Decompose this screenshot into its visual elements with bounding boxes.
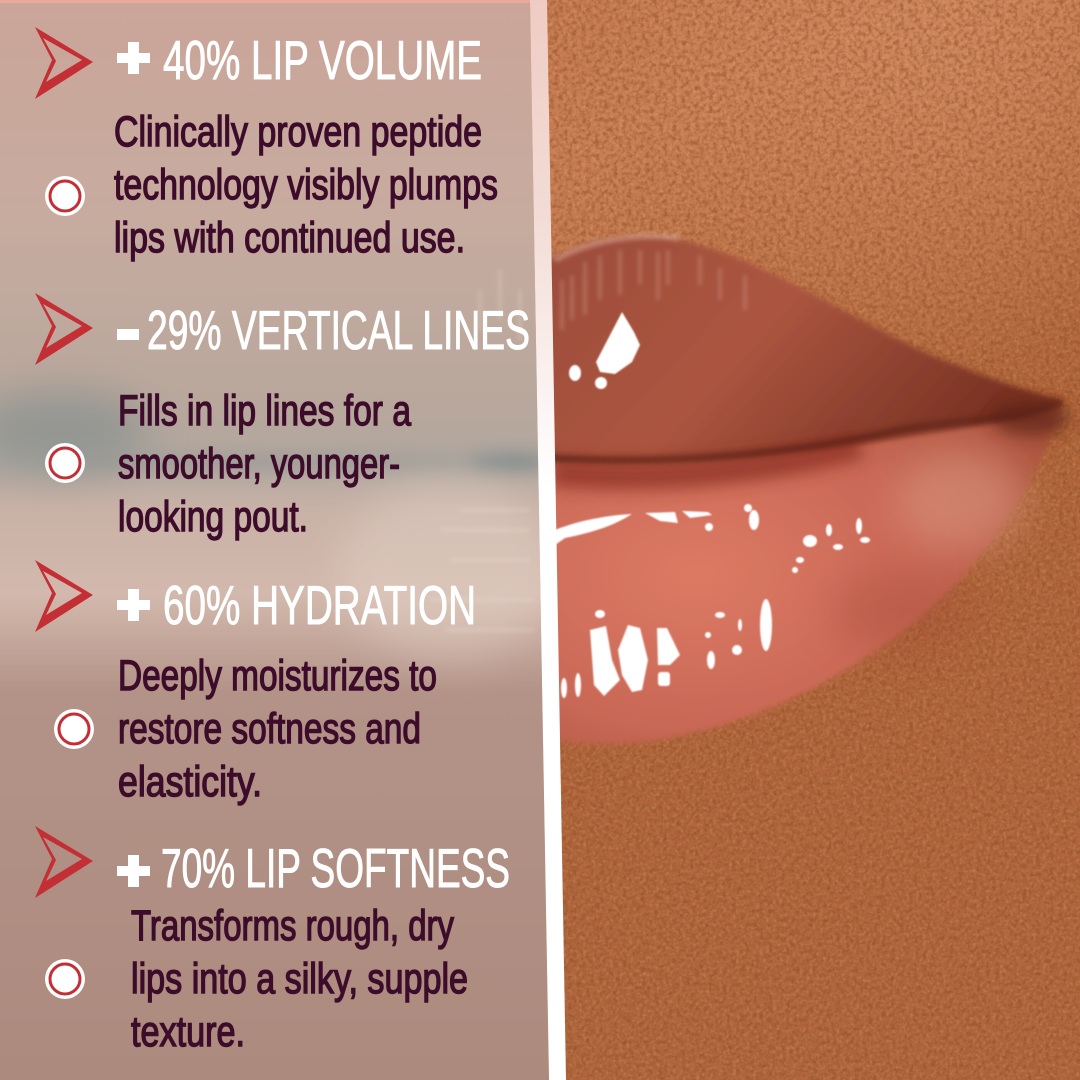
- faded gloss texture: [478, 274, 521, 336]
- text: description: Fills in lip lines for a: [118, 387, 411, 435]
- photo: glossy lips: [540, 236, 1070, 744]
- icon: bullet circle: [45, 176, 85, 216]
- lip gloss texture: [555, 236, 745, 330]
- text: description: smoother, younger-: [118, 440, 400, 488]
- item 2: vertical lines: [35, 293, 530, 541]
- text: description: elasticity.: [118, 758, 262, 806]
- text: description: [118, 652, 437, 806]
- icon: bullet circle: [45, 959, 85, 999]
- item 1: lip volume: [35, 27, 498, 262]
- icon: bullet circle: [54, 709, 94, 749]
- divider strip: [530, 0, 566, 1080]
- lip highlights: [555, 312, 870, 698]
- icon: arrow: [35, 27, 93, 99]
- heading: 70% lip softness: 70% LIP SOFTNESS: [161, 837, 510, 899]
- icon: minus sign: [117, 329, 139, 340]
- text: description: Transforms rough, dry: [131, 902, 454, 950]
- text: description: [131, 902, 468, 1056]
- heading: 29% vertical lines: 29% VERTICAL LINES: [147, 299, 530, 361]
- text: description: technology visibly plumps: [114, 161, 498, 209]
- icon: plus sign: [117, 42, 150, 74]
- icon: bullet circle: [45, 443, 85, 483]
- panel: translucent overlay with faded lips: [0, 0, 560, 1080]
- text: description: Deeply moisturizes to: [118, 652, 437, 700]
- text: description: lips into a silky, supple: [131, 955, 468, 1003]
- text: description: [118, 387, 411, 541]
- icon: plus sign: [117, 855, 150, 887]
- text: description: looking pout.: [118, 493, 308, 541]
- icon: arrow: [35, 293, 93, 365]
- heading: 60% hydration: 60% HYDRATION: [163, 574, 476, 636]
- text: description: Clinically proven peptide: [114, 108, 482, 156]
- icon: arrow: [35, 560, 93, 632]
- text: description: [114, 108, 498, 262]
- text: description: lips with continued use.: [114, 214, 465, 262]
- heading: 40% lip volume: 40% LIP VOLUME: [163, 29, 482, 91]
- icon: arrow: [35, 826, 93, 898]
- text: description: texture.: [131, 1008, 245, 1056]
- icon: plus sign: [117, 589, 150, 621]
- text: description: restore softness and: [118, 705, 421, 753]
- item 3: hydration: [35, 560, 476, 806]
- item 4: lip softness: [35, 826, 510, 1056]
